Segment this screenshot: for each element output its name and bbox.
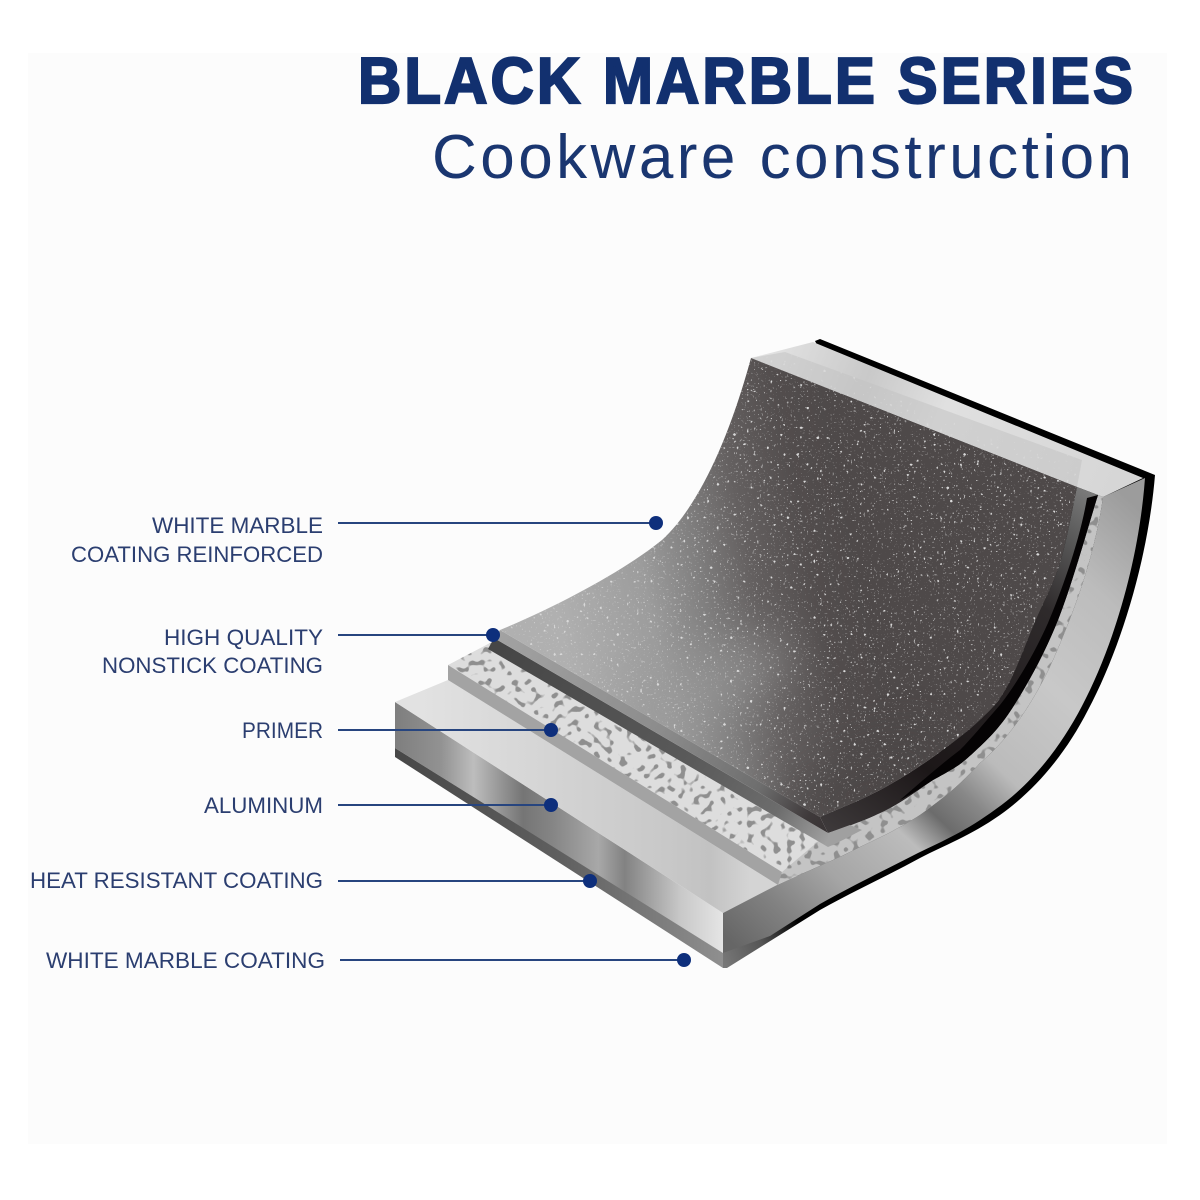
- layer: nonstick upper lip: [494, 630, 828, 833]
- layer: outer black rim: [723, 339, 1155, 968]
- layer: primer side edge: [448, 665, 782, 885]
- callout: heat resistant coating: [30, 868, 597, 893]
- shading: surface light streak: [700, 626, 798, 714]
- layer: aluminum front side: [395, 702, 723, 953]
- callout: white marble coating reinforced: COATING REINFORCED: [71, 542, 323, 567]
- callout: aluminum: [204, 793, 558, 818]
- layer: heat resistant coating strip: [395, 748, 723, 968]
- title: BLACK MARBLE SERIES: [358, 45, 1133, 118]
- callout: aluminum: ALUMINUM: [204, 793, 323, 818]
- layer: back top strip: [751, 342, 1143, 497]
- shading: surface dark lower corner: [775, 755, 936, 817]
- callout: white marble coating: WHITE MARBLE COATING: [46, 948, 325, 973]
- texture: small marble speckles: [502, 360, 1076, 816]
- layer: back strip speckled edge: [752, 352, 1082, 487]
- layer: primer top face: [448, 643, 828, 872]
- texture: large marble speckles: [501, 362, 1076, 816]
- subtitle: Cookware construction: [432, 123, 1132, 192]
- callout: high quality nonstick coating: NONSTICK COATING: [102, 653, 323, 678]
- layer: aluminum top face: [395, 680, 778, 913]
- callout: high quality nonstick coating: HIGH QUALITY: [164, 625, 323, 650]
- callout: heat resistant coating: HEAT RESISTANT COATING: [30, 868, 323, 893]
- layer: nonstick lower band: [488, 638, 828, 847]
- layer: nonstick coating curved band: [820, 487, 1098, 833]
- layer: nonstick front light edge: [828, 825, 862, 847]
- cookware cross-section illustration: [395, 339, 1155, 968]
- callout: white marble coating reinforced: WHITE MARBLE: [152, 513, 323, 538]
- callout: high quality nonstick coating: [102, 625, 500, 678]
- layer: nonstick black stripe: [900, 495, 1098, 800]
- callout: white marble coating reinforced: [71, 513, 663, 567]
- callout: primer: [242, 718, 558, 743]
- layer: marble surface: [500, 358, 1077, 817]
- callout: primer: PRIMER: [242, 718, 323, 743]
- callout: white marble coating: [46, 948, 691, 973]
- texture: primer blobs: [456, 498, 1102, 880]
- layer: primer curved edge: [777, 495, 1103, 885]
- layer: aluminum curved side: [723, 478, 1145, 953]
